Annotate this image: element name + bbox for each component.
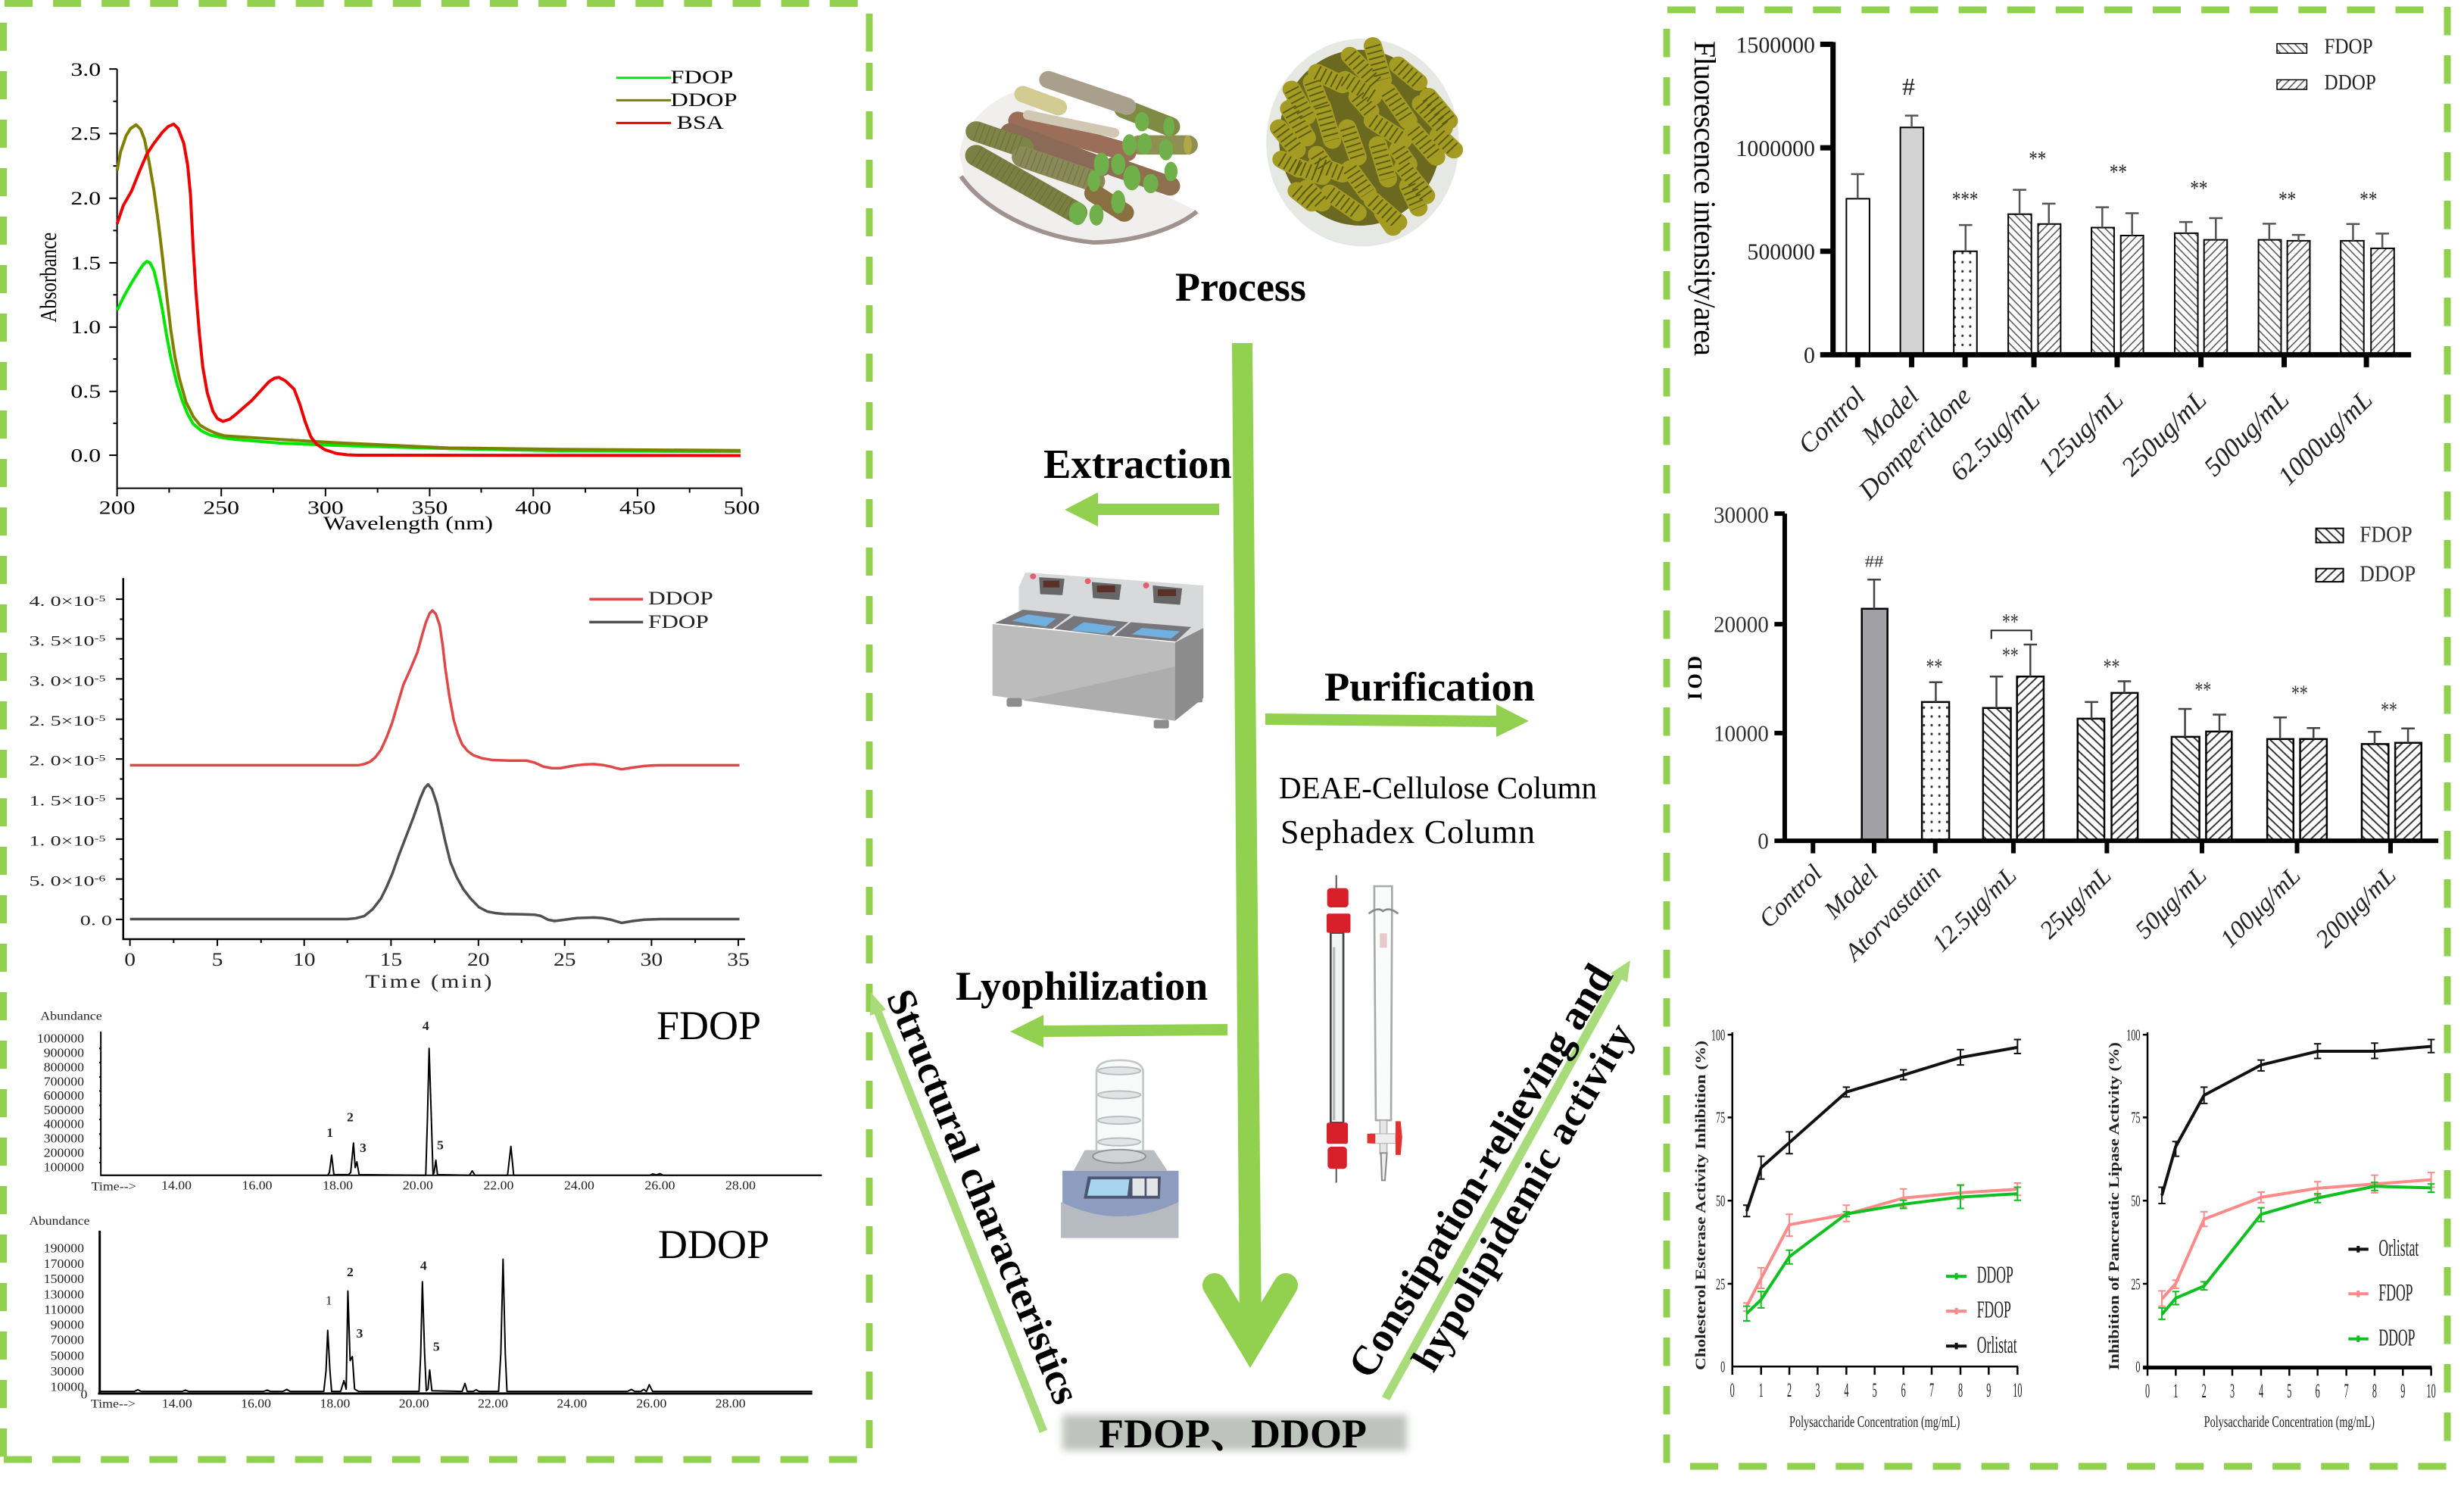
rotated label: bioactivity: Constipation-relieving and bbox=[1339, 956, 1622, 1385]
peaks bbox=[100, 1260, 812, 1391]
y axis title: pancreatic lipase: Inhibition of Pancreatic Lipase Activity (%) bbox=[2107, 1042, 2122, 1370]
labels: 800000 bbox=[44, 1060, 84, 1074]
labels: 24.00 bbox=[557, 1397, 588, 1410]
x labels: IOD chart: 25μg/mL bbox=[2035, 862, 2117, 944]
axis and legend labels: 3. 0×10 bbox=[29, 674, 95, 689]
legend and axis labels: 250 bbox=[203, 498, 239, 519]
x labels: IOD chart: Control bbox=[1754, 860, 1828, 933]
labels: ** bbox=[1926, 654, 1942, 679]
axis and legend labels: 3. 5×10 bbox=[29, 634, 95, 649]
icon: freeze dryer bbox=[1061, 1060, 1178, 1238]
labels: 0 bbox=[81, 1388, 88, 1401]
labels: ** bbox=[2002, 643, 2019, 668]
labels: 10000 bbox=[51, 1380, 84, 1394]
labels: Abundance bbox=[40, 1009, 102, 1022]
legend markers bbox=[2348, 1246, 2369, 1253]
labels: DDOP bbox=[2378, 1324, 2415, 1351]
labels: 18.00 bbox=[320, 1397, 351, 1410]
icon: chromatography columns bbox=[1327, 875, 1402, 1183]
labels: # bbox=[1902, 74, 1915, 101]
labels: ** bbox=[2110, 160, 2127, 184]
labels: 1 bbox=[326, 1125, 333, 1140]
axis and legend labels: -5 bbox=[95, 633, 105, 644]
bar chart: lipid IOD bbox=[1714, 503, 2438, 854]
series: FDOP bbox=[1743, 1183, 2021, 1311]
UV absorbance chart bbox=[36, 60, 759, 534]
comparison bracket bbox=[1991, 630, 2032, 641]
labels: 5 bbox=[2287, 1381, 2291, 1403]
labels: Orlistat bbox=[2378, 1235, 2419, 1261]
arrow: structural characteristics bbox=[870, 992, 1047, 1433]
heading: Extraction: Extraction bbox=[1043, 441, 1232, 487]
series: DDOP bbox=[1743, 1185, 2021, 1321]
axis and legend labels: 5 bbox=[212, 948, 223, 970]
x labels: IOD chart: Atorvastatin bbox=[1839, 860, 1947, 967]
labels: Time--> bbox=[91, 1397, 136, 1410]
series: DDOP bbox=[2158, 1182, 2434, 1319]
line chart: cholesterol esterase inhibition bbox=[1711, 1026, 2022, 1431]
axis and legend labels: -5 bbox=[95, 594, 105, 604]
labels: 16.00 bbox=[241, 1397, 271, 1410]
labels: 7 bbox=[2344, 1381, 2349, 1403]
labels: FDOP bbox=[2378, 1279, 2413, 1306]
bars bbox=[1846, 127, 2394, 354]
labels: 3 bbox=[357, 1326, 363, 1341]
axis and legend labels: 1. 0×10 bbox=[29, 834, 95, 849]
x labels: fluorescence chart: 1000ug/mL bbox=[2272, 385, 2378, 491]
x labels: fluorescence chart: 500ug/mL bbox=[2198, 385, 2295, 482]
labels: 3 bbox=[1815, 1380, 1820, 1401]
labels: 200000 bbox=[44, 1146, 84, 1160]
labels: Abundance bbox=[29, 1214, 89, 1228]
legend and axis labels: 200 bbox=[99, 498, 135, 519]
labels: 20.00 bbox=[399, 1397, 429, 1410]
labels: 20000 bbox=[1714, 612, 1769, 638]
legend lines bbox=[616, 76, 671, 79]
labels: FDOP bbox=[1977, 1296, 2011, 1323]
axis and legend labels: 0 bbox=[124, 948, 136, 970]
labels: 6 bbox=[2316, 1381, 2320, 1403]
labels: 0 bbox=[1730, 1380, 1735, 1401]
labels: 9 bbox=[1986, 1380, 1991, 1401]
error bars bbox=[1851, 116, 2389, 251]
axis and legend labels: 20 bbox=[467, 948, 490, 970]
legend and axis labels: 1.0 bbox=[70, 317, 101, 338]
x labels: IOD chart bbox=[1754, 860, 2402, 967]
series: Orlistat bbox=[1743, 1040, 2021, 1216]
labels: 30000 bbox=[51, 1364, 84, 1378]
axis and legend labels: 4. 0×10 bbox=[29, 594, 95, 610]
labels: 22.00 bbox=[483, 1179, 514, 1192]
bar chart: constipation fluorescence bbox=[1736, 32, 2411, 368]
labels: 100 bbox=[1711, 1026, 1725, 1044]
labels bbox=[1714, 503, 2416, 854]
text: column types: DEAE-Cellulose Column bbox=[1279, 770, 1597, 805]
labels: 90000 bbox=[51, 1318, 84, 1332]
axis and legend labels: 15 bbox=[380, 948, 402, 970]
labels: 1000000 bbox=[1736, 136, 1815, 161]
legend and axis labels: 450 bbox=[619, 498, 656, 519]
labels: 400000 bbox=[44, 1117, 84, 1132]
axis and legend labels: Time (min) bbox=[365, 971, 492, 992]
axes bbox=[1774, 514, 2438, 854]
labels: 2 bbox=[347, 1110, 354, 1124]
labels: ** bbox=[2104, 654, 2119, 679]
right dashed panel border bbox=[1667, 7, 2449, 1469]
x labels: IOD chart: Model bbox=[1819, 860, 1884, 925]
axis and legend labels: 30 bbox=[641, 948, 663, 970]
labels: 5 bbox=[1873, 1380, 1877, 1401]
labels: 110000 bbox=[44, 1303, 84, 1316]
x labels: fluorescence chart bbox=[1792, 381, 2378, 505]
labels bbox=[1711, 1026, 2022, 1431]
x labels: IOD chart: 100μg/mL bbox=[2216, 862, 2306, 953]
labels bbox=[1736, 32, 2377, 368]
labels: 18.00 bbox=[323, 1179, 353, 1192]
legend and axis labels bbox=[36, 60, 759, 534]
axis and legend labels: -5 bbox=[95, 673, 105, 684]
rotated label: bioactivity: hypolipidemic activity bbox=[1403, 1016, 1642, 1378]
series: FDOP bbox=[2158, 1172, 2434, 1307]
main downward arrow bbox=[1215, 343, 1286, 1344]
labels: DDOP bbox=[1977, 1261, 2013, 1288]
labels: 7 bbox=[1929, 1380, 1934, 1401]
legend and axis labels: 2.5 bbox=[70, 124, 101, 145]
labels: 4 bbox=[1844, 1380, 1848, 1401]
y axis title: IOD: IOD bbox=[1684, 656, 1706, 700]
labels: ** bbox=[2381, 698, 2397, 723]
labels: 50 bbox=[1716, 1192, 1725, 1210]
legend and axis labels: BSA bbox=[677, 113, 724, 133]
legend and axis labels: Absorbance bbox=[36, 233, 61, 323]
labels: 2 bbox=[2202, 1381, 2207, 1403]
legend and axis labels: 400 bbox=[515, 498, 551, 519]
curve: FDOP bbox=[117, 261, 741, 451]
labels: FDOP bbox=[2360, 522, 2413, 548]
axis and legend labels: -6 bbox=[95, 873, 106, 884]
curve: FDOP bbox=[130, 785, 740, 923]
curve: DDOP bbox=[130, 610, 740, 770]
labels: 1 bbox=[2173, 1381, 2178, 1403]
text: column types: Sephadex Column bbox=[1280, 813, 1535, 851]
labels: 26.00 bbox=[645, 1179, 675, 1192]
labels: ** bbox=[2029, 147, 2046, 171]
axis and legend labels: 1. 5×10 bbox=[29, 794, 95, 809]
axis and legend labels: 0. 0 bbox=[80, 913, 112, 929]
heading: Purification: Purification bbox=[1324, 664, 1535, 710]
sample label: DDOP: DDOP bbox=[658, 1222, 769, 1267]
labels: Polysaccharide Concentration (mg/mL) bbox=[2204, 1413, 2375, 1431]
x labels: IOD chart: 12.5μg/mL bbox=[1927, 862, 2023, 957]
axis and legend labels: 10 bbox=[293, 948, 315, 970]
labels: 130000 bbox=[44, 1288, 84, 1301]
labels: 20.00 bbox=[403, 1179, 433, 1192]
labels bbox=[2126, 1026, 2436, 1431]
labels: Orlistat bbox=[1977, 1331, 2017, 1358]
legend and axis labels: Wavelength (nm) bbox=[323, 514, 493, 534]
labels: 50 bbox=[2131, 1192, 2141, 1210]
labels: 16.00 bbox=[242, 1179, 273, 1192]
labels bbox=[29, 1214, 746, 1410]
labels: 10000 bbox=[1714, 721, 1769, 746]
legend and axis labels: 1.5 bbox=[70, 253, 101, 273]
labels: 28.00 bbox=[716, 1397, 746, 1410]
legend and axis labels: 3.0 bbox=[70, 60, 101, 80]
labels: 3 bbox=[2230, 1381, 2235, 1403]
axis and legend labels: DDOP bbox=[648, 588, 713, 609]
labels: 30000 bbox=[1714, 503, 1769, 528]
labels: 75 bbox=[2131, 1109, 2141, 1127]
line chart: pancreatic lipase inhibition bbox=[2126, 1026, 2436, 1431]
heading: Lyophilization: Lyophilization bbox=[956, 963, 1208, 1009]
labels: 4 bbox=[423, 1019, 429, 1033]
labels: 0 bbox=[2145, 1381, 2150, 1403]
labels: ** bbox=[2190, 176, 2207, 201]
labels: 0 bbox=[1758, 829, 1769, 854]
labels: ** bbox=[2002, 609, 2019, 634]
y axis title: fluorescence: Fluorescence intensity/area bbox=[1688, 41, 1722, 356]
y axis title: cholesterol esterase: Cholesterol Esterase Activity Inhibition (%) bbox=[1693, 1041, 1709, 1370]
x labels: fluorescence chart: Model bbox=[1855, 381, 1925, 451]
GPC chromatogram chart bbox=[29, 578, 750, 992]
legend and axis labels: FDOP bbox=[671, 67, 733, 88]
labels: 50000 bbox=[51, 1349, 84, 1363]
labels: 10 bbox=[2427, 1381, 2436, 1403]
labels: 2 bbox=[1787, 1380, 1792, 1401]
labels: 10 bbox=[2013, 1380, 2022, 1401]
labels: 25 bbox=[1716, 1275, 1725, 1293]
x labels: IOD chart: 200μg/mL bbox=[2311, 862, 2402, 953]
labels: 70000 bbox=[51, 1333, 84, 1347]
icon: water bath extractor bbox=[993, 573, 1203, 729]
labels: 22.00 bbox=[478, 1397, 508, 1410]
labels: 75 bbox=[1716, 1109, 1725, 1127]
text: column types bbox=[1279, 770, 1597, 851]
labels: 1 bbox=[326, 1294, 332, 1307]
heading: Process: Process bbox=[1175, 264, 1306, 310]
labels: 5 bbox=[437, 1138, 444, 1153]
legend and axis labels: 300 bbox=[307, 498, 344, 519]
labels: ** bbox=[2360, 187, 2377, 211]
labels: 500000 bbox=[1747, 239, 1815, 265]
labels: 0 bbox=[1720, 1358, 1725, 1376]
axis and legend labels bbox=[29, 588, 750, 992]
GC-MS chart: DDOP bbox=[29, 1214, 812, 1410]
labels: DDOP bbox=[2324, 70, 2376, 94]
labels: ** bbox=[2194, 678, 2211, 702]
labels: 14.00 bbox=[162, 1397, 192, 1410]
x labels: fluorescence chart: Domperidone bbox=[1852, 381, 1977, 505]
sample label: FDOP: FDOP bbox=[657, 1003, 761, 1048]
labels: 8 bbox=[1958, 1380, 1963, 1401]
legend swatches bbox=[2277, 44, 2306, 53]
labels: FDOP bbox=[2324, 34, 2373, 58]
labels: 600000 bbox=[44, 1088, 84, 1103]
labels: 14.00 bbox=[161, 1179, 192, 1192]
axis and legend labels: 2. 0×10 bbox=[29, 754, 95, 769]
labels: 100000 bbox=[44, 1160, 84, 1174]
legend and axis labels: 350 bbox=[412, 498, 448, 519]
curve: BSA bbox=[117, 124, 741, 456]
axis and legend labels: FDOP bbox=[648, 611, 709, 632]
left dashed panel border bbox=[3, 3, 869, 1463]
labels: 2 bbox=[347, 1265, 354, 1279]
labels: *** bbox=[1952, 187, 1978, 211]
peaks bbox=[101, 1048, 822, 1175]
arrow: to purification bbox=[1265, 704, 1529, 737]
GC-MS chart: FDOP bbox=[37, 1009, 822, 1193]
labels: ** bbox=[2278, 187, 2296, 211]
labels: 900000 bbox=[44, 1046, 84, 1060]
series: Orlistat bbox=[2158, 1040, 2434, 1203]
labels: ## bbox=[1865, 553, 1884, 571]
labels: 150000 bbox=[44, 1272, 84, 1286]
labels: 190000 bbox=[44, 1241, 84, 1256]
axis and legend labels: -5 bbox=[95, 713, 105, 723]
photo: fresh stems on plate bbox=[959, 80, 1197, 244]
labels: 1500000 bbox=[1736, 32, 1815, 58]
photo: dried stems in bowl bbox=[1266, 39, 1459, 246]
legend and axis labels: 0.5 bbox=[70, 382, 101, 402]
axis and legend labels: -5 bbox=[95, 793, 105, 804]
curve: DDOP bbox=[117, 125, 741, 451]
labels: 0 bbox=[1804, 342, 1815, 368]
legend and axis labels: 500 bbox=[724, 498, 759, 519]
labels: 25 bbox=[2131, 1275, 2141, 1293]
axis and legend labels: 25 bbox=[554, 948, 576, 970]
axis and legend labels: 5. 0×10 bbox=[29, 874, 95, 889]
labels: DDOP bbox=[2360, 561, 2416, 587]
labels: 3 bbox=[360, 1141, 366, 1155]
labels: 500000 bbox=[44, 1103, 84, 1117]
axes bbox=[1820, 42, 2411, 367]
legend markers bbox=[1946, 1273, 1967, 1279]
labels bbox=[37, 1009, 756, 1193]
arrow: to extraction bbox=[1065, 492, 1219, 526]
labels: 0 bbox=[2135, 1358, 2141, 1376]
x labels: fluorescence chart: 62.5ug/mL bbox=[1945, 385, 2046, 486]
labels: 5 bbox=[433, 1340, 440, 1353]
axis and legend labels: 35 bbox=[727, 948, 750, 970]
error bars bbox=[1867, 579, 2415, 744]
x labels: IOD chart: 50μg/mL bbox=[2130, 862, 2213, 944]
labels: 6 bbox=[1901, 1380, 1906, 1401]
labels: Polysaccharide Concentration (mg/mL) bbox=[1789, 1413, 1960, 1431]
labels: 100 bbox=[2126, 1026, 2141, 1044]
labels: 24.00 bbox=[564, 1179, 594, 1192]
labels: 9 bbox=[2400, 1381, 2405, 1403]
labels: 300000 bbox=[44, 1132, 84, 1146]
labels: ** bbox=[2291, 681, 2308, 706]
axis and legend labels: -5 bbox=[95, 833, 105, 844]
labels: 28.00 bbox=[725, 1179, 756, 1192]
labels: 700000 bbox=[44, 1075, 84, 1088]
rotated label: Structural characteristics: Structural characteristics bbox=[878, 983, 1090, 1410]
x labels: fluorescence chart: 125ug/mL bbox=[2032, 385, 2129, 482]
legend and axis labels: 0.0 bbox=[70, 445, 101, 466]
product box: FDOP and DDOP: FDOP、DDOP bbox=[1099, 1411, 1367, 1456]
axis and legend labels: -5 bbox=[95, 753, 105, 763]
labels: Time--> bbox=[92, 1180, 136, 1193]
bars bbox=[1862, 609, 2422, 841]
legend swatches bbox=[2316, 529, 2344, 542]
labels: 4 bbox=[420, 1259, 427, 1272]
labels: 170000 bbox=[44, 1257, 84, 1271]
arrow: to lyophilization bbox=[1010, 1015, 1227, 1047]
axis and legend labels: 2. 5×10 bbox=[29, 713, 95, 729]
labels: 26.00 bbox=[636, 1397, 667, 1410]
labels: 1 bbox=[1759, 1380, 1764, 1401]
x labels: fluorescence chart: Control bbox=[1792, 381, 1871, 460]
labels: 1000000 bbox=[37, 1032, 84, 1046]
legend and axis labels: 2.0 bbox=[70, 189, 101, 209]
x labels: fluorescence chart: 250ug/mL bbox=[2116, 385, 2213, 482]
arrow: bioactivity bbox=[1382, 960, 1630, 1400]
legend and axis labels: DDOP bbox=[671, 90, 738, 111]
labels: 4 bbox=[2259, 1381, 2263, 1403]
labels: 8 bbox=[2372, 1381, 2377, 1403]
legend lines bbox=[589, 598, 643, 601]
